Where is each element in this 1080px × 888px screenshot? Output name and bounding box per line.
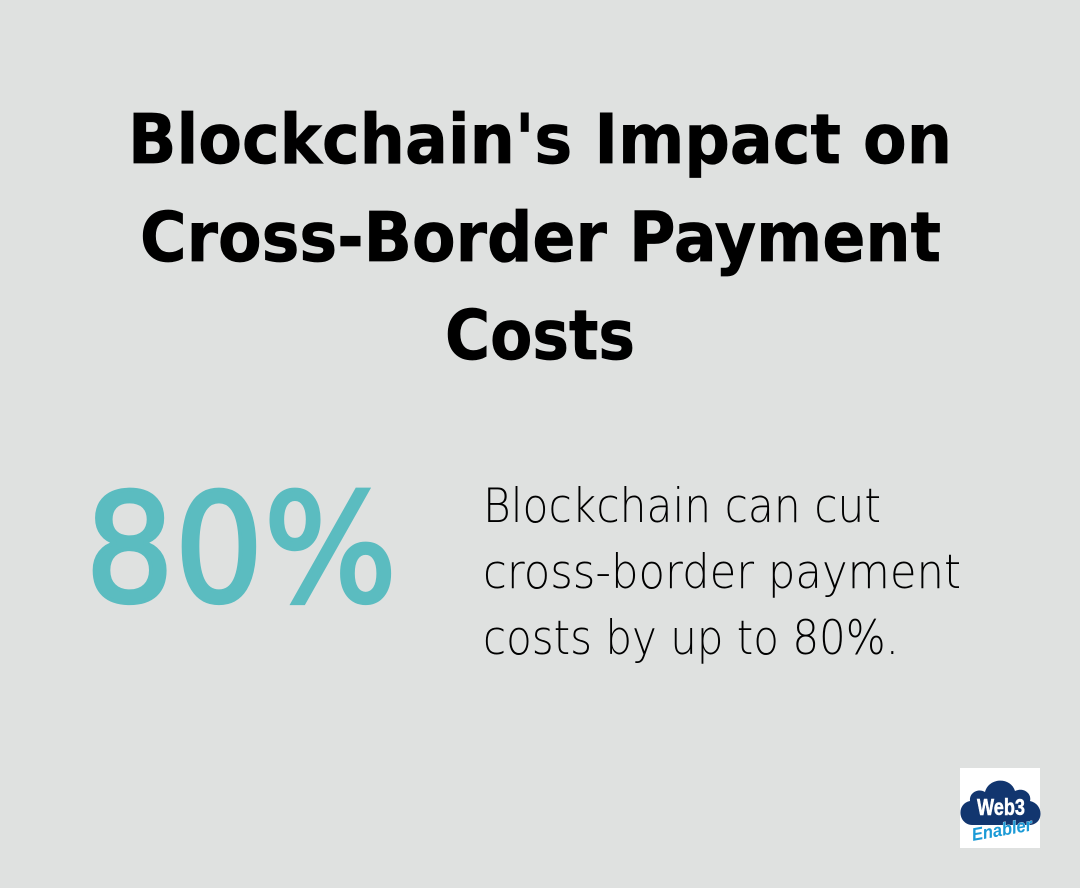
big stat: 80%: 80% <box>85 463 397 637</box>
title: Blockchain's Impact on <box>128 100 952 180</box>
icon: cloud <box>960 781 1040 825</box>
stat description: Blockchain can cut <box>483 479 881 534</box>
title: Cross-Border Payment <box>140 198 941 278</box>
logo: Web3 Enabler <box>960 768 1040 848</box>
title <box>128 100 952 376</box>
stat description <box>483 479 961 666</box>
logo word: Web3: Web3 <box>977 794 1025 820</box>
logo word: Enabler: Enabler <box>970 814 1034 845</box>
stat description: cross-border payment <box>483 545 961 600</box>
title: Costs <box>445 296 635 376</box>
stat description: costs by up to 80%. <box>483 611 899 666</box>
